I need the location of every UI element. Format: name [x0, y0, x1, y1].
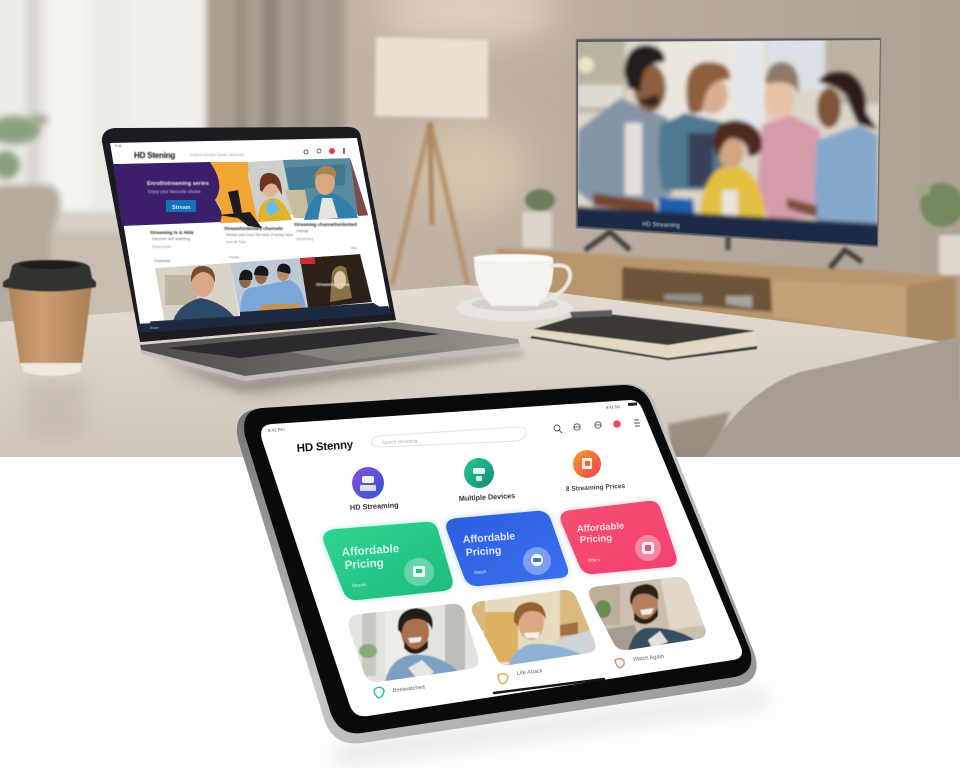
panel: living room photo [0, 0, 960, 460]
laptop text rows: Streaming channel/unlimited [294, 222, 357, 227]
chair [703, 337, 960, 460]
notebook [530, 310, 757, 360]
caption: tile 1: Bestwatched [393, 685, 425, 694]
desk [0, 285, 960, 460]
laptop text rows: Discover and watching [152, 237, 190, 241]
card: pink pricing [560, 501, 677, 574]
laptop text rows: Stream/Unlimited channels [224, 226, 283, 231]
laptop dock icons [196, 319, 236, 323]
cup lid [3, 260, 96, 292]
laptop text rows: and all Tops [226, 240, 246, 244]
sofa [0, 181, 134, 322]
cup base [20, 363, 82, 376]
laptop hero banner [113, 158, 372, 228]
tablet shadow [335, 690, 770, 765]
lamp shade [375, 37, 488, 118]
status bar right [606, 402, 637, 410]
blue card note: Watch [474, 569, 487, 575]
photo tile: bearded man [585, 572, 710, 652]
TV set [570, 34, 886, 268]
feature label: streaming prices: 8 Streaming Prices [566, 483, 626, 493]
green card note: Stream [352, 582, 367, 588]
coffee mug and saucer [457, 254, 573, 321]
blue card glow [446, 511, 568, 586]
blue card body [446, 511, 568, 586]
pink card body [560, 501, 677, 574]
trackpad [290, 338, 414, 362]
laptop logo: HD Stening [134, 151, 175, 160]
caption: tile 3: Watch Again [633, 654, 664, 663]
pink card icon [635, 535, 661, 561]
banner button: Stream [172, 205, 191, 211]
media console [496, 248, 958, 342]
TV bottom band [578, 204, 878, 245]
caption: tile 2: Life Aback [517, 668, 543, 677]
laptop photo: group [230, 258, 308, 316]
search bar [372, 427, 526, 447]
blue card title: Affordable [462, 530, 516, 546]
caption: tile 1 [374, 685, 425, 698]
pink card title: Affordable [576, 521, 625, 535]
laptop text rows: Streaming tv & Hide [150, 230, 194, 235]
feature icon: streaming prices [573, 450, 601, 478]
card: pink pricing: Pricing [579, 533, 613, 546]
feature icon: HD streaming [352, 467, 384, 499]
card: blue pricing: Pricing [465, 545, 502, 559]
laptop photo: man [155, 263, 240, 325]
keyboard [166, 327, 440, 358]
laptop text rows: Play [351, 246, 357, 250]
feature label: HD streaming: HD Streaming [350, 500, 399, 512]
green card body [323, 522, 453, 600]
card: blue pricing [446, 511, 568, 586]
caption: tile 3 [615, 654, 664, 668]
TV frame [576, 38, 881, 247]
laptop lid bottom [140, 313, 396, 342]
banner woman [248, 160, 293, 222]
woman right [814, 125, 878, 225]
tablet black bezel [244, 385, 751, 733]
status bar right: 9:41 5G [606, 404, 620, 410]
window [0, 0, 208, 230]
laptop photo: movie [300, 254, 372, 308]
card: green pricing [323, 522, 453, 600]
banner subtext: Enjoy your favourite shows [148, 189, 201, 194]
plant left [0, 114, 48, 179]
laptop lid [102, 127, 396, 342]
laptop text rows: Channels [154, 259, 170, 263]
laptop text rows: Upcoming [296, 237, 313, 241]
pink card note: Offers [588, 557, 601, 563]
tablet screen [261, 400, 742, 716]
laptop photo: movie: Streaming series [316, 282, 350, 287]
feature icon: multiple devices [464, 458, 494, 488]
home indicator [494, 679, 604, 693]
laptop base [140, 322, 520, 380]
cup sleeve [8, 285, 92, 364]
blue card icon [523, 547, 551, 575]
laptop text rows: Shows and more the best of series here [226, 233, 293, 237]
TV screen: family [578, 40, 880, 245]
laptop text rows [150, 222, 357, 263]
banner heading: Enroll/streaming series [147, 181, 209, 187]
photo tile: smiling man [465, 585, 600, 670]
banner photo man [283, 158, 372, 220]
laptop text rows: Display [296, 229, 309, 233]
feature label: multiple devices: Multiple Devices [459, 491, 515, 503]
tablet silver body [237, 384, 757, 744]
lamp tripod [392, 122, 468, 285]
banner button [166, 200, 196, 212]
man [576, 98, 672, 205]
search bar: Search streaming [382, 438, 418, 445]
tablet [237, 384, 757, 744]
wall [204, 0, 960, 345]
green card icon [404, 558, 434, 586]
lamp glow [380, 0, 560, 220]
lamp [375, 37, 488, 285]
pink card glow [560, 501, 677, 574]
banner purple [113, 162, 223, 226]
laptop text rows: Show more [152, 245, 171, 249]
girl [757, 115, 820, 222]
status bar left: 9:41 Pm [268, 427, 285, 433]
small plant [522, 189, 555, 248]
green card title: Affordable [341, 543, 400, 559]
caption: tile 2 [498, 668, 543, 684]
app logo: HD Stenny [296, 439, 354, 455]
woman 2 [658, 113, 735, 190]
header icons [554, 420, 640, 433]
reflection shadows on desk [24, 354, 468, 438]
floor [960, 400, 961, 457]
banner orange [210, 162, 260, 223]
laptop [102, 127, 525, 392]
laptop shadow [140, 350, 525, 392]
child [700, 165, 766, 218]
plant and vase right [916, 183, 960, 275]
laptop nav icons [304, 148, 345, 154]
curtain [204, 0, 348, 128]
laptop dock label: Share [150, 326, 159, 330]
laptop nav: Explore Movies Series Watchlist [190, 153, 245, 157]
card: green pricing: Pricing [344, 557, 384, 572]
TV caption text: HD Streaming [642, 222, 680, 229]
laptop bottom photos [138, 254, 392, 332]
shadow under chair [668, 412, 730, 460]
laptop status text: 9:41 [115, 144, 122, 148]
TV stand [585, 230, 862, 268]
laptop screen [110, 138, 390, 324]
green card glow [323, 522, 453, 600]
laptop dock bar [138, 302, 392, 327]
coffee cup [3, 260, 96, 376]
photo tile: man with curly hair [340, 600, 485, 690]
laptop text rows: Popular [229, 255, 239, 259]
